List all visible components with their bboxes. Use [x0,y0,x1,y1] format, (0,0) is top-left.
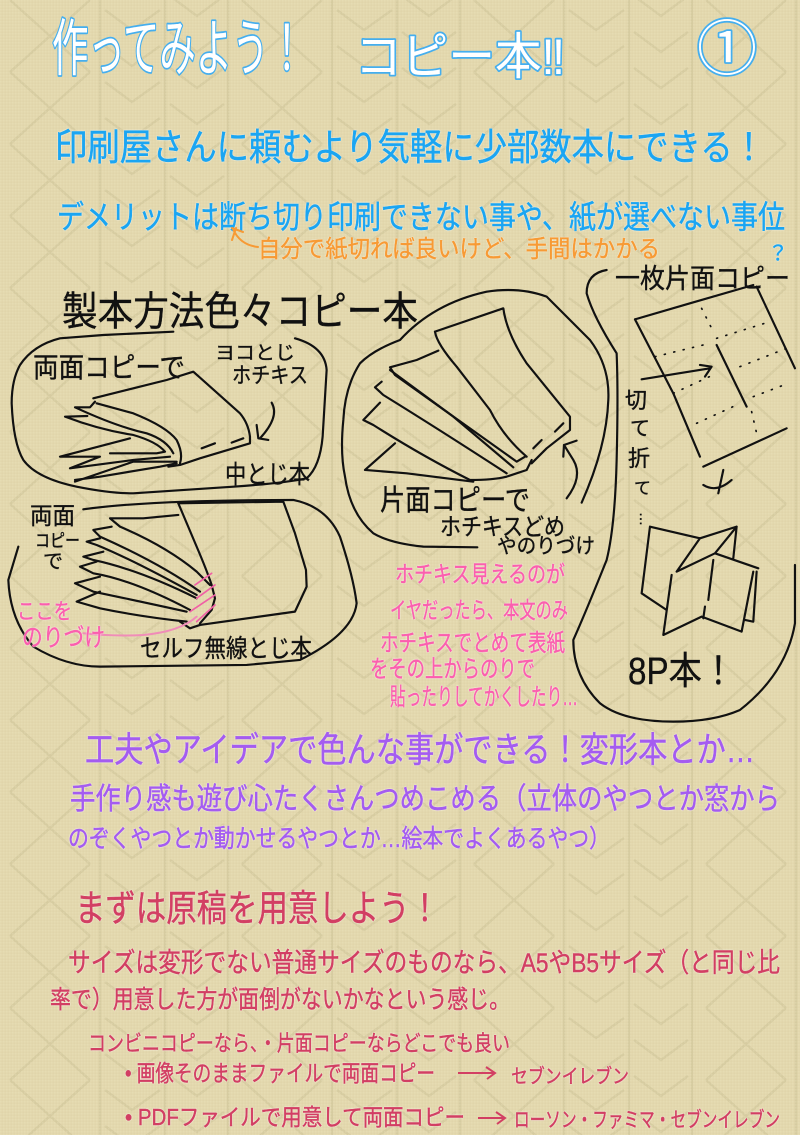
red text: convenience store copy: • PDFファイルで用意して両面コピー [125,1104,465,1130]
label: self perfect binding: セルフ無線とじ本 [140,635,312,663]
pink note: ホチキス見えるのが [395,561,565,587]
arrow and store: Seven-Eleven: セブンイレブン [511,1064,629,1088]
pink note: ホチキスでとめて表紙 [380,630,565,657]
label: stapler side binding [215,343,308,388]
label: cut and fold, vertical: て [630,418,650,440]
panel: perfect binding [8,500,357,667]
purple section: variations [68,731,780,853]
panel: saddle stitch book [12,332,327,493]
label: double sided copy, vertical [30,503,80,573]
book sketch [60,372,250,482]
arrow down [703,470,732,493]
panel outline and sketch [342,290,608,547]
pink note: イヤだったら、本文のみ [390,597,568,623]
orange note with arrow: 自分で紙切れば良いけど、手間はかかる [258,236,660,263]
red text: convenience store copy: コンビニコピーなら、・片面コピーならどこでも良い [88,1031,510,1056]
demerit line: blue [57,199,788,265]
label: single sheet copy: 一枚片面コピー [615,264,790,294]
label: double sided copy, vertical: で [43,551,63,573]
label: staple or glue: やのりづけ [497,535,595,558]
panel outline [12,332,327,493]
arrow to stitch [257,403,274,440]
label: stapler side binding: ヨコとじ [215,343,295,364]
arrow and store: Seven-Eleven [458,1064,629,1088]
label: glue here: ここを [17,599,72,624]
label: glue here [17,599,105,652]
folded book [642,527,758,635]
panel outline and sketches [573,270,795,722]
page number: ① [697,16,757,83]
title: 作ってみよう！ [52,15,305,84]
orange note with arrow [232,228,660,263]
label: staple or glue: ホチキスどめ [440,514,565,541]
demerit line: blue: ？ [768,243,788,265]
pink note: 貼ったりしてかくしたり… [390,684,578,711]
label: staple or glue [440,514,595,558]
panel: single sided stapled [342,290,608,558]
purple section: variations: のぞくやつとか動かせるやつとか…絵本でよくあるやつ） [68,825,610,853]
cut and fold sheet [635,285,795,467]
pink note: をその上からのりで [370,656,535,683]
label: cut and fold, vertical: 折 [628,446,650,471]
red text: size advice: 率で）用意した方が面倒がないかなという感じ。 [50,986,510,1014]
label: single sided copy: 片面コピーで [380,484,530,517]
red heading: prepare manuscript: まずは原稿を用意しよう！ [75,888,440,929]
panel outline and sketch [8,500,357,667]
label: double sided copy, vertical: 両面 [30,503,75,530]
red text: convenience store copy [88,1031,780,1132]
title: コピー本‼ [355,29,565,85]
pink note [370,561,578,711]
panel: single sheet 8 page book [573,264,795,722]
label: saddle stitch: 中とじ本 [225,461,310,489]
label: glue here: のりづけ [22,624,105,652]
label: double sided copy, vertical: コピー [35,531,80,551]
label: cut and fold, vertical: 切 [625,388,647,413]
heading: binding methods: 製本方法色々コピー本 [62,290,418,334]
label: double sided copy: 両面コピーで [33,352,185,383]
red text: convenience store copy: • 画像そのままファイルで両面コピー [125,1060,435,1086]
label: stapler side binding: ホチキス [232,363,308,388]
label: cut and fold, vertical: て [634,479,651,498]
red text: size advice [50,948,780,1014]
label: cut and fold, vertical: … [637,512,653,526]
label: 8P book: 8P本！ [628,651,735,693]
arrow to staple [563,441,577,498]
label: cut and fold, vertical [625,388,653,526]
